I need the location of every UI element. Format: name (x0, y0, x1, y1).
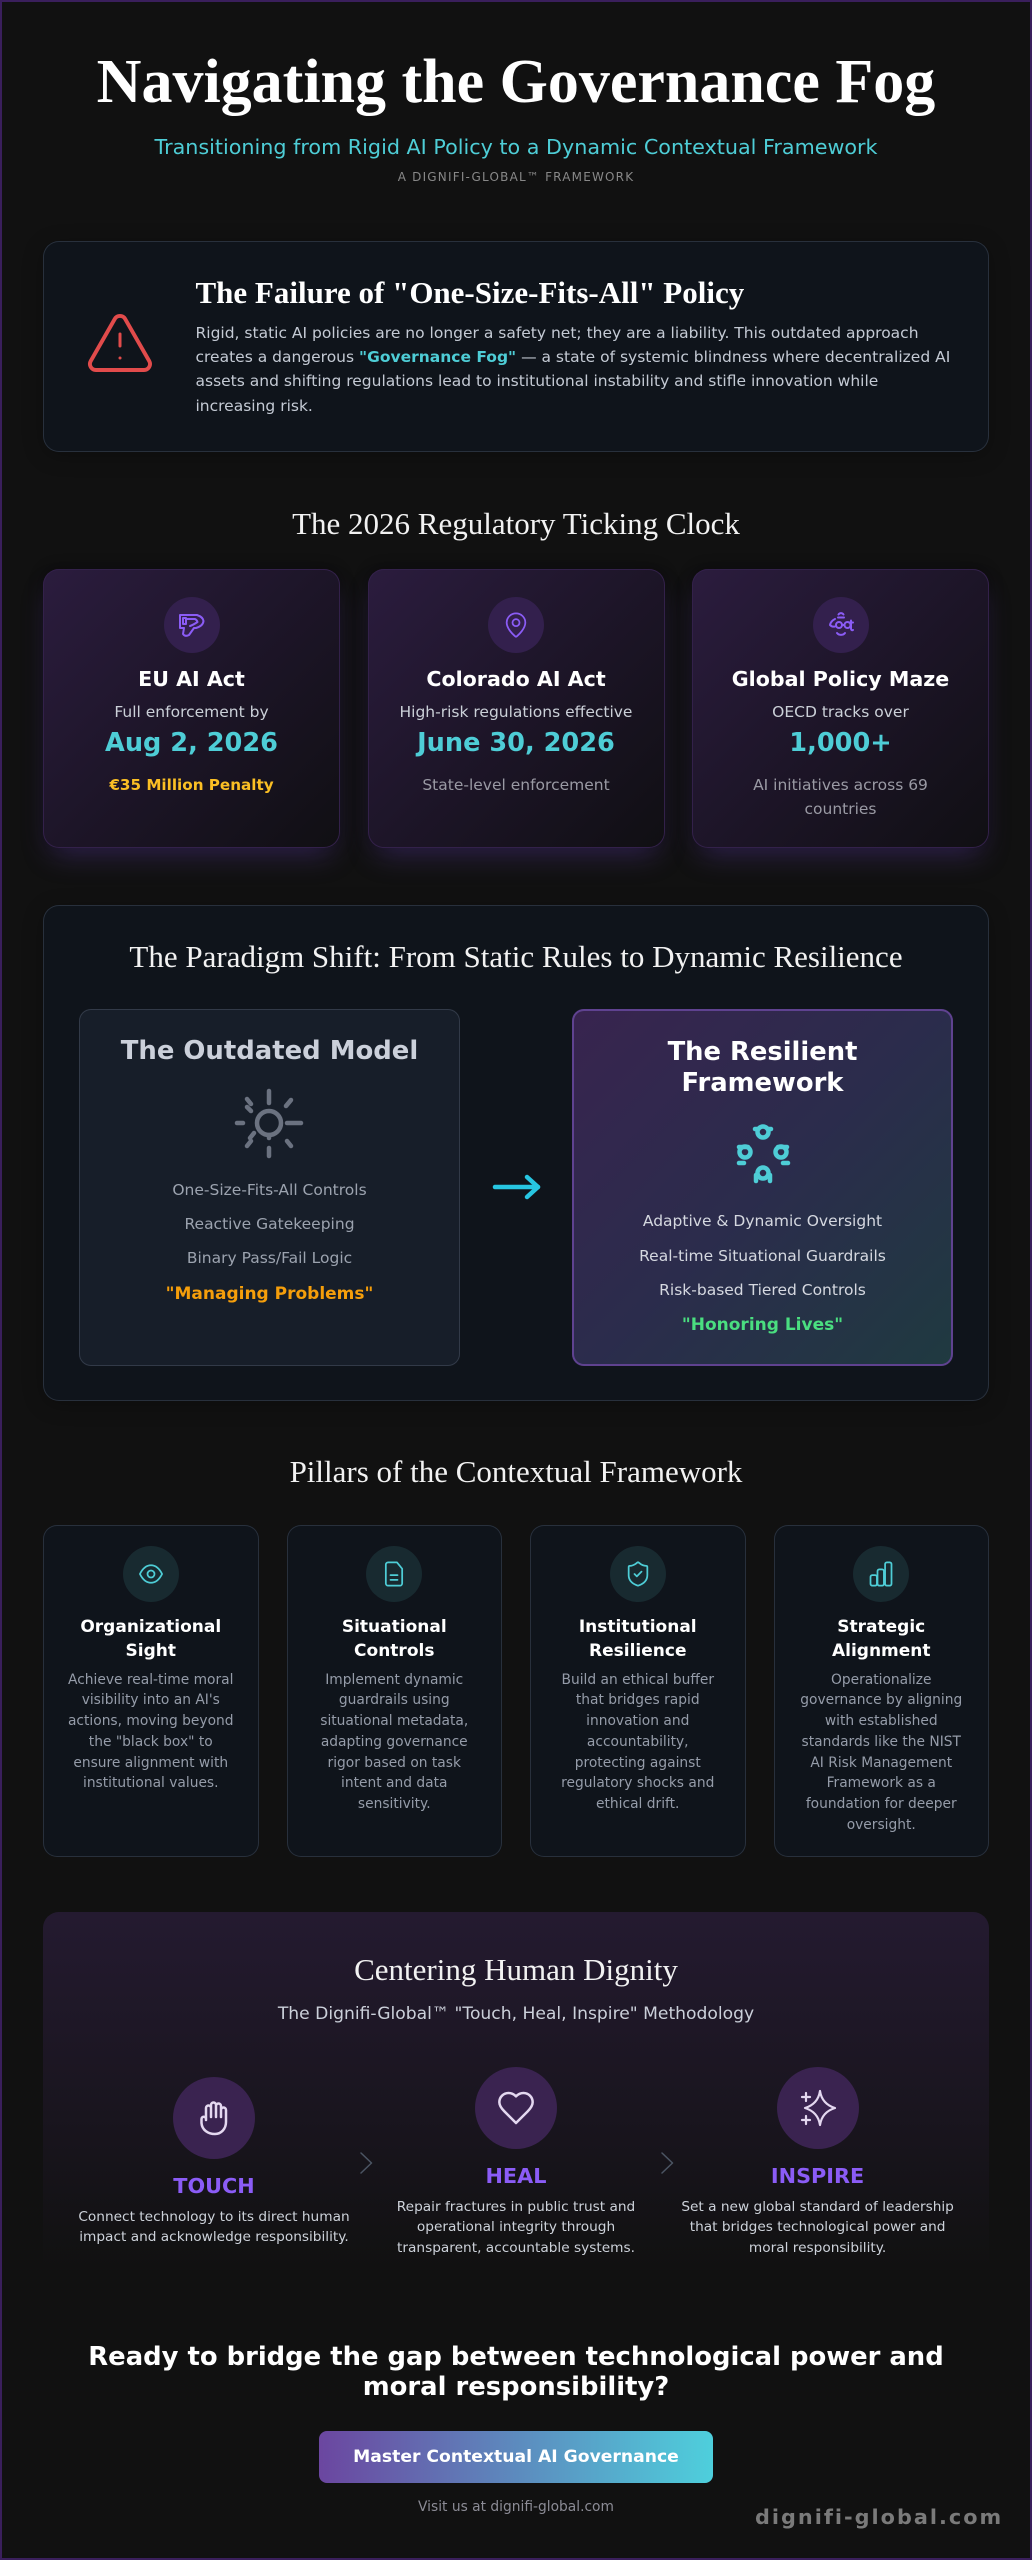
pillar description: Operationalize (831, 1672, 932, 1688)
watermark: dignifi-global.com (755, 2505, 1003, 2529)
icon: connected nodes (736, 1124, 790, 1184)
card title: Global Policy Maze (732, 667, 949, 691)
pillar description: governance by aligning (800, 1692, 962, 1708)
outcome: managing problems: "Managing Problems" (166, 1284, 373, 1304)
card label: High-risk regulations effective (400, 703, 632, 721)
pillar description: Implement dynamic (325, 1672, 463, 1688)
text: failure description (196, 324, 950, 415)
pillar title (832, 1617, 931, 1661)
pillar title: Institutional (579, 1617, 697, 1637)
heading: outdated model: The Outdated Model (121, 1036, 418, 1066)
pillar description: intent and data (341, 1775, 447, 1791)
list item: Risk-based Tiered Controls (659, 1281, 866, 1299)
card: Colorado AI Act (368, 569, 664, 848)
outcome: honoring lives: "Honoring Lives" (682, 1315, 843, 1335)
step text: inspire (681, 2199, 954, 2256)
card label: OECD tracks over (772, 703, 909, 721)
pillar description (561, 1672, 714, 1812)
step text: inspire: Set a new global standard of leadership (681, 2199, 954, 2215)
pillar description: with established (825, 1713, 938, 1729)
call to action heading: moral responsibility? (363, 2372, 669, 2402)
list item: Reactive Gatekeeping (184, 1215, 355, 1233)
pillar description: ethical drift. (596, 1796, 679, 1812)
card title: Colorado AI Act (426, 667, 606, 691)
pillar description: regulatory shocks and (561, 1775, 714, 1791)
icon: map pin (488, 597, 544, 653)
pillar description: accountability, (587, 1734, 689, 1750)
pillar description: ensure alignment with (73, 1754, 228, 1770)
list item: One-Size-Fits-All Controls (172, 1181, 367, 1199)
heading: paradigm shift: The Paradigm Shift: From Static Rules to Dynamic Resilience (129, 939, 903, 974)
step text: inspire: that bridges technological power and (690, 2219, 945, 2235)
subtitle: Transitioning from Rigid AI Policy to a Dynamic Contextual Framework (154, 135, 878, 159)
title: Navigating the Governance Fog (97, 48, 935, 116)
text: failure description: Rigid, static AI policies are no longer a safety net; they are a liability. This outdated approach (196, 324, 919, 342)
pillar description: guardrails using (339, 1692, 450, 1708)
pillar title (80, 1617, 221, 1661)
pillar title (342, 1617, 447, 1661)
icon: document (366, 1546, 422, 1602)
pillar card: organizational sight (43, 1525, 258, 1857)
panel: centering human dignity (43, 1912, 989, 2267)
call to action heading (88, 2342, 944, 2402)
step text: heal (397, 2199, 635, 2256)
pillar description: actions, moving beyond (68, 1713, 234, 1729)
pillar title: Resilience (589, 1641, 686, 1661)
heading: failure: The Failure of "One-Size-Fits-All" Policy (196, 275, 744, 310)
pillar description: Framework as a (827, 1775, 936, 1791)
list item: Real-time Situational Guardrails (639, 1247, 886, 1265)
icon: sparkles (777, 2067, 859, 2149)
pillar description: Achieve real-time moral (68, 1672, 233, 1688)
arrow: old to new (492, 1174, 540, 1200)
pillar title: Controls (354, 1641, 434, 1661)
button (319, 2431, 713, 2483)
icon: broken bulb (234, 1088, 304, 1158)
chevron (360, 2152, 372, 2174)
card note: State-level enforcement (422, 776, 610, 794)
icon: eye (123, 1546, 179, 1602)
list item: Adaptive & Dynamic Oversight (643, 1212, 882, 1230)
step text: touch: Connect technology to its direct human (78, 2209, 350, 2225)
call to action heading: Ready to bridge the gap between technological power and (88, 2342, 944, 2372)
pillar title: Alignment (832, 1641, 931, 1661)
card: EU AI Act (43, 569, 340, 848)
icon: shield check (610, 1546, 666, 1602)
step text: touch (78, 2209, 350, 2245)
pillar description: rigor based on task (328, 1754, 461, 1770)
button: Master Contextual AI Governance (353, 2447, 679, 2467)
panel: resilient framework (572, 1009, 953, 1366)
pillar description (320, 1672, 468, 1812)
pillar card: strategic alignment (774, 1525, 989, 1857)
step label: inspire: INSPIRE (771, 2164, 864, 2188)
heading: resilient framework: Framework (682, 1068, 843, 1098)
pillar description: innovation and (586, 1713, 689, 1729)
pillar description: foundation for deeper (806, 1796, 957, 1812)
icon: gavel (164, 597, 220, 653)
heading: resilient framework (668, 1037, 857, 1098)
list item: Binary Pass/Fail Logic (187, 1249, 352, 1267)
heading: regulatory clock: The 2026 Regulatory Ticking Clock (292, 506, 740, 541)
card label: Full enforcement by (114, 703, 269, 721)
icon: heart (475, 2067, 557, 2149)
pillar title: Organizational (80, 1617, 221, 1637)
pillar title: Strategic (837, 1617, 925, 1637)
step label: heal: HEAL (486, 2164, 546, 2188)
card date: Aug 2, 2026 (105, 728, 278, 758)
text: failure description: increasing risk. (196, 397, 313, 415)
chevron (661, 2152, 674, 2174)
card: Global Policy Maze (692, 569, 989, 848)
heading: pillars: Pillars of the Contextual Framework (290, 1454, 742, 1489)
panel: failure of policy (43, 241, 989, 452)
footer link: Visit us at dignifi-global.com (418, 2499, 614, 2515)
step text: heal: transparent, accountable systems. (397, 2240, 635, 2256)
step text: touch: impact and acknowledge responsibility. (79, 2229, 349, 2245)
pillar description: institutional values. (83, 1775, 219, 1791)
card penalty: €35 Million Penalty (109, 776, 274, 794)
panel: paradigm shift (43, 905, 989, 1401)
pillar description: sensitivity. (358, 1796, 431, 1812)
step text: inspire: moral responsibility. (749, 2240, 886, 2256)
pillar card: situational controls (286, 1525, 502, 1857)
icon: warning triangle (88, 314, 152, 372)
step text: heal: Repair fractures in public trust and (397, 2199, 635, 2215)
pillar description: situational metadata, (320, 1713, 468, 1729)
tagline: A DIGNIFI-GLOBAL™ FRAMEWORK (398, 170, 634, 184)
pillar description: standards like the NIST (802, 1734, 961, 1750)
pillar description: AI Risk Management (810, 1754, 952, 1770)
icon: hand (173, 2077, 255, 2159)
pillar description: the "black box" to (89, 1734, 213, 1750)
card date: June 30, 2026 (417, 728, 615, 758)
card note: countries (804, 800, 877, 818)
subheading: methodology: The Dignifi-Global™ "Touch, Heal, Inspire" Methodology (278, 2004, 754, 2024)
text: failure description: assets and shifting regulations lead to institutional instability and stifle innovation while (196, 372, 878, 390)
heading: resilient framework: The Resilient (668, 1037, 857, 1067)
pillar description (68, 1672, 234, 1791)
text: failure description: creates a dangerous "Governance Fog" — a state of systemic blindness where decentralized AI (196, 348, 950, 366)
pillar card: institutional resilience (530, 1525, 746, 1857)
pillar title (579, 1617, 697, 1661)
pillar title: Situational (342, 1617, 447, 1637)
pillar description: adapting governance (321, 1734, 468, 1750)
icon: bar chart (853, 1546, 909, 1602)
pillar description: oversight. (847, 1817, 916, 1833)
pillar description: visibility into an AI's (82, 1692, 220, 1708)
card note: AI initiatives across 69 (753, 776, 928, 794)
pillar description: that bridges rapid (576, 1692, 700, 1708)
pillar description: Build an ethical buffer (561, 1672, 714, 1688)
pillar description (800, 1672, 962, 1833)
step text: heal: operational integrity through (417, 2219, 615, 2235)
heading: human dignity: Centering Human Dignity (354, 1952, 678, 1987)
icon: global network (812, 597, 868, 653)
card title: EU AI Act (138, 667, 245, 691)
card figure: 1,000+ (789, 728, 892, 758)
pillar title: Sight (126, 1641, 176, 1661)
step label: touch: TOUCH (173, 2174, 255, 2198)
card note (753, 776, 928, 818)
pillar description: protecting against (575, 1754, 701, 1770)
panel: outdated model (79, 1009, 460, 1366)
